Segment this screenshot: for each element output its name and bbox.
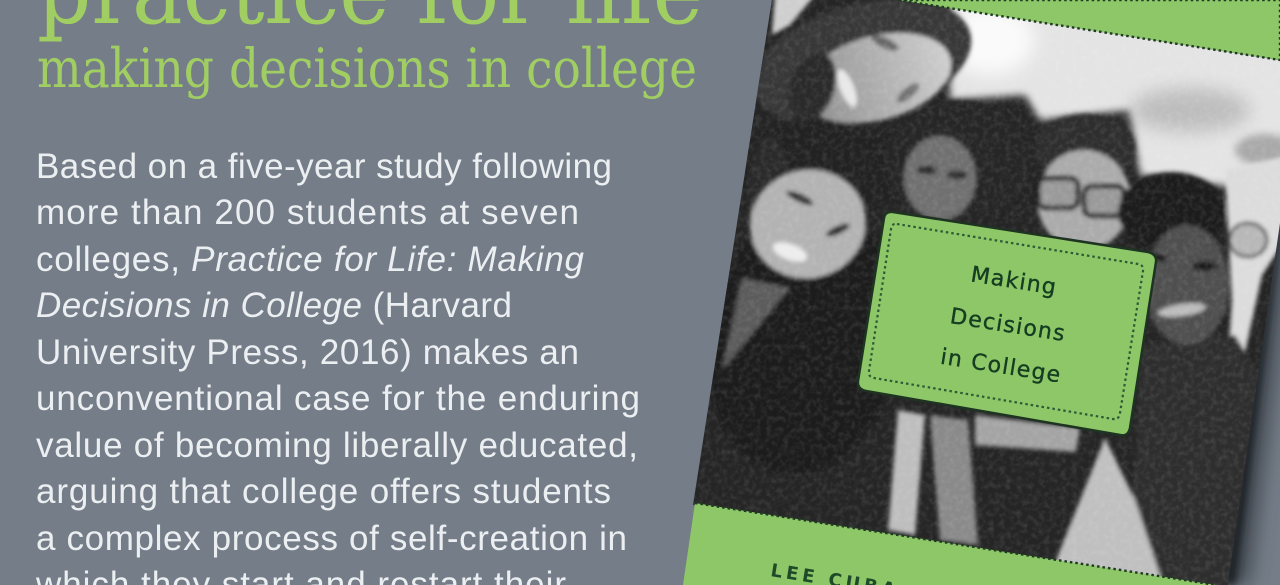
title label xyxy=(858,212,1156,435)
top student xyxy=(756,0,975,122)
body paragraph: Decisions in College (Harvard xyxy=(36,286,512,325)
back student on the right xyxy=(1225,155,1280,365)
subheading: making decisions in college: making decisions in college xyxy=(37,37,697,100)
body paragraph: a complex process of self-creation in xyxy=(36,519,627,558)
top green band xyxy=(898,0,1280,60)
cover photo of students xyxy=(680,0,1280,585)
body paragraph: value of becoming liberally educated, xyxy=(36,426,638,465)
book cover xyxy=(680,0,1280,585)
label title text: Decisions xyxy=(948,304,1068,347)
body paragraph xyxy=(35,147,640,585)
left student hair and body xyxy=(711,226,885,472)
body paragraph: unconventional case for the enduring xyxy=(36,379,640,418)
sky background xyxy=(950,0,1280,195)
label title text: in College xyxy=(939,345,1063,388)
body paragraph: Based on a five-year study following xyxy=(36,147,612,186)
centre student xyxy=(902,96,982,220)
cover shadow xyxy=(1222,215,1280,585)
lower figures xyxy=(722,278,790,370)
left student face xyxy=(746,166,870,282)
label title text xyxy=(939,262,1068,388)
right student xyxy=(1130,335,1265,585)
body paragraph: colleges, Practice for Life: Making xyxy=(36,240,585,279)
glasses student xyxy=(1035,114,1135,182)
bottom green band xyxy=(683,503,1216,585)
body paragraph: arguing that college offers students xyxy=(36,472,611,511)
body paragraph: University Press, 2016) makes an xyxy=(36,333,579,372)
dotted inner border xyxy=(869,224,1143,419)
label title text: Making xyxy=(969,262,1059,301)
body paragraph: more than 200 students at seven xyxy=(36,193,579,232)
